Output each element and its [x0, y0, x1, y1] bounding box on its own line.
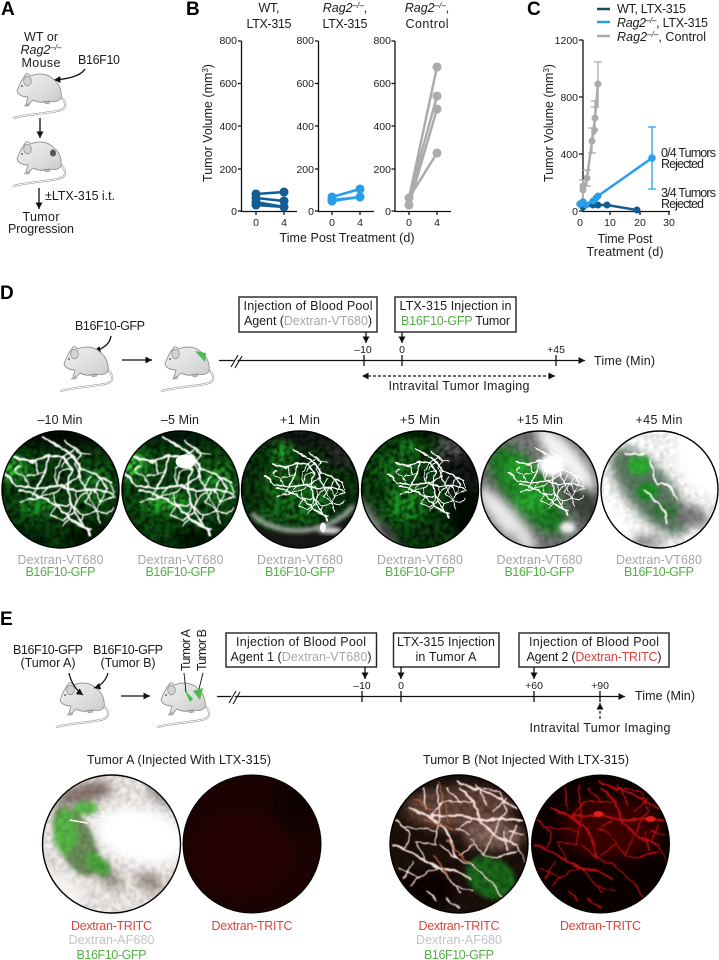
- chart: Rag2 LTX-315: 200: [296, 164, 314, 176]
- x axis title: Time Post Treatment (d): [280, 231, 414, 245]
- series: Rag2 LTX-315: [577, 127, 656, 208]
- image: tumor B merged: Dextran-AF680: [416, 933, 502, 947]
- chart: Rag2 control: 0: [385, 206, 391, 218]
- heading: tumor A: Tumor A (Injected With LTX-315): [87, 753, 271, 767]
- chart: Rag2 LTX-315: Rag2: [323, 1, 353, 15]
- tumor B label: (Tumor B): [100, 656, 156, 670]
- panel A: tumor model: [1, 0, 120, 236]
- timeline: 0: [399, 344, 405, 356]
- timeline: 0: [398, 680, 404, 692]
- y axis title: 3: [201, 68, 210, 73]
- annotation: 0/4 rejected: 0/4 Tumors: [661, 146, 716, 160]
- image: -10 min: [1, 414, 120, 576]
- image: tumor B merged: [389, 774, 529, 960]
- image: tumor B TRITC: Dextran-TRITC: [560, 919, 641, 933]
- image: tumor B merged: Dextran-TRITC: [418, 919, 500, 933]
- outcome label: [8, 210, 74, 236]
- panel E: two-tumor imaging schedule and images: [0, 609, 695, 960]
- chart: Rag2 control: [373, 1, 451, 229]
- image: +15 min: +15 Min: [517, 413, 563, 427]
- B16F10 label: B16F10: [78, 53, 120, 67]
- tumor B label: [93, 643, 163, 670]
- image: -5 min: [121, 414, 240, 576]
- icon: mouse with tumor: [13, 142, 65, 186]
- axes: 10: [604, 217, 616, 229]
- icon: mouse with GFP tumor: [161, 347, 213, 391]
- callout: blood pool agent 2: Injection of Blood Pool: [529, 635, 659, 649]
- outcome label: Progression: [8, 222, 74, 236]
- chart: Rag2 LTX-315: 0: [329, 217, 335, 229]
- label: tumor B rotated: Tumor B: [195, 629, 209, 671]
- image: -5 min: B16F10-GFP: [146, 565, 216, 579]
- chart: Rag2 control: 0: [406, 217, 412, 229]
- chart: Rag2 control: 800: [373, 35, 391, 47]
- chart: WT LTX-315: 4: [281, 217, 287, 229]
- heading: tumor B: Tumor B (Not Injected With LTX-315): [423, 753, 629, 767]
- image: +15 min: B16F10-GFP: [504, 565, 574, 579]
- mouse label: Rag2: [20, 43, 50, 57]
- chart: Rag2 LTX-315: 400: [296, 121, 314, 133]
- arrow: imaging window: [363, 375, 555, 377]
- axes: 0: [572, 206, 578, 218]
- chart: WT LTX-315: 600: [219, 78, 237, 90]
- arrow: to tumor mouse: [121, 695, 150, 697]
- annotation: 3/4 rejected: 3/4 Tumors: [661, 186, 716, 200]
- outcome label: Tumor: [22, 210, 60, 224]
- image: +1 min: Dextran-VT680: [257, 553, 343, 567]
- image: +5 min: +5 Min: [400, 413, 440, 427]
- chart: WT LTX-315: LTX-315: [246, 17, 292, 31]
- arrow: 0: [401, 332, 403, 343]
- icon: mouse: [56, 683, 108, 727]
- legend: Rag2: [617, 30, 647, 44]
- chart: WT LTX-315: 800: [219, 35, 237, 47]
- image: tumor A TRITC: Dextran-TRITC: [212, 919, 292, 933]
- arrow: to tumor mouse: [122, 359, 152, 361]
- y axis title: Tumor Volume (mm: [201, 73, 215, 182]
- legend: [597, 2, 708, 44]
- legend: , Control: [658, 30, 706, 44]
- legend: Rag2: [617, 16, 646, 30]
- callout: blood pool agent 2: [519, 633, 669, 667]
- panel D: intravital imaging schedule and images: [0, 283, 719, 579]
- chart: Rag2 LTX-315: ,: [364, 1, 367, 15]
- chart: Rag2 control: ,: [446, 1, 449, 15]
- image: tumor B TRITC: [530, 774, 670, 933]
- chart: Rag2 control: 600: [373, 78, 391, 90]
- chart: Rag2 control: Rag2: [405, 1, 435, 15]
- chart: Rag2 LTX-315: –/–: [352, 1, 364, 10]
- image: tumor A merged: Dextran-TRITC: [71, 919, 152, 933]
- image: -10 min: Dextran-VT680: [18, 553, 104, 567]
- chart: WT LTX-315: 200: [219, 164, 237, 176]
- mouse label: [20, 30, 62, 70]
- annotation: 0/4 rejected: Rejected: [661, 157, 704, 171]
- image: tumor A merged: [42, 774, 182, 959]
- mouse label: –/–: [49, 43, 62, 52]
- panel letter E: E: [0, 609, 13, 630]
- arrow: +60: [533, 667, 535, 679]
- legend: WT, LTX-315: [617, 2, 686, 16]
- image: +1 min: B16F10-GFP: [265, 565, 335, 579]
- tumor B label: B16F10-GFP: [93, 643, 163, 657]
- arrow: imaging at +90: [599, 703, 601, 719]
- image: +45 min: +45 Min: [636, 413, 683, 427]
- chart: Rag2 control: 400: [373, 121, 391, 133]
- arrow: treatment: [38, 188, 40, 209]
- chart: WT LTX-315: WT,: [258, 1, 280, 15]
- chart: Rag2 LTX-315: 800: [296, 35, 314, 47]
- chart: Rag2 control: 4: [434, 217, 440, 229]
- axes: 0: [577, 217, 583, 229]
- annotation: 0/4 rejected: [661, 146, 716, 171]
- x axis title: Treatment (d): [586, 245, 664, 259]
- image: +45 min: B16F10-GFP: [624, 565, 694, 579]
- arrow: tumor B injection: [94, 673, 108, 688]
- tumor A label: B16F10-GFP: [13, 643, 83, 657]
- callout: LTX-315 injection: B16F10-GFP Tumor: [401, 314, 510, 328]
- imaging label: Intravital Tumor Imaging: [388, 379, 530, 393]
- timeline: [219, 344, 655, 368]
- callout: blood pool agent 1: [226, 633, 376, 667]
- callout: blood pool agent 1: Injection of Blood Pool: [236, 635, 366, 649]
- y axis title: 3: [542, 68, 551, 73]
- label: tumor A rotated: Tumor A: [179, 628, 193, 671]
- axes: 800: [560, 92, 578, 104]
- callout: blood pool agent 2: Agent 2 (Dextran-TRITC): [526, 650, 662, 664]
- annotation: 3/4 rejected: Rejected: [661, 197, 704, 211]
- chart: Rag2 LTX-315: LTX-315: [322, 17, 368, 31]
- axes: 20: [634, 217, 646, 229]
- image: +45 min: Dextran-VT680: [616, 553, 702, 567]
- panel letter D: D: [0, 283, 14, 304]
- callout: LTX-315 injection: [394, 633, 499, 667]
- chart: Rag2 LTX-315: 600: [296, 78, 314, 90]
- series: WT: [580, 202, 640, 213]
- arrow: down: [39, 118, 41, 138]
- tumor A label: (Tumor A): [20, 656, 76, 670]
- y axis title: ): [542, 64, 556, 68]
- image: +5 min: Dextran-VT680: [377, 553, 463, 567]
- treatment label: ±LTX-315 i.t.: [45, 189, 115, 203]
- timeline: Time (Min): [635, 689, 695, 703]
- image: +15 min: Dextran-VT680: [496, 553, 583, 567]
- tumor A label: [13, 643, 83, 670]
- arrow: injection: [54, 69, 85, 80]
- icon: mouse with two tumors: [157, 673, 209, 727]
- mouse label: Mouse: [22, 56, 61, 70]
- axes: [555, 35, 675, 229]
- chart: Rag2 control: 200: [373, 164, 391, 176]
- imaging label: Intravital Tumor Imaging: [530, 721, 671, 735]
- axes: 400: [560, 149, 578, 161]
- timeline: –10: [354, 344, 372, 356]
- callout: LTX-315 injection: LTX-315 Injection in: [400, 299, 512, 313]
- legend: , LTX-315: [656, 16, 708, 30]
- chart: Rag2 LTX-315: 4: [357, 217, 363, 229]
- image: +5 min: B16F10-GFP: [385, 565, 455, 579]
- x axis title: [586, 232, 664, 259]
- arrow: 0: [400, 667, 402, 679]
- timeline: +45: [547, 344, 565, 356]
- axes: 30: [663, 217, 675, 229]
- timeline: –10: [353, 680, 371, 692]
- cell label: B16F10-GFP: [75, 319, 145, 333]
- image: tumor A merged: Dextran-AF680: [68, 933, 155, 947]
- series: control: [579, 62, 602, 200]
- chart: Rag2 control: Control: [406, 17, 448, 31]
- callout: blood pool agent 1: Agent 1 (Dextran-VT680): [230, 650, 372, 664]
- chart: WT LTX-315: 400: [219, 121, 237, 133]
- arrow: -10: [364, 667, 366, 679]
- chart: WT LTX-315: 0: [253, 217, 259, 229]
- chart: Rag2 LTX-315: [296, 1, 374, 229]
- y axis title: Tumor Volume (mm: [542, 73, 556, 182]
- timeline: [217, 680, 695, 704]
- image: -5 min: –5 Min: [161, 413, 199, 427]
- callout: blood pool agent: Injection of Blood Pool: [244, 299, 372, 313]
- annotation: 3/4 rejected: [661, 186, 716, 211]
- icon: mouse: [60, 347, 112, 391]
- callout: LTX-315 injection: in Tumor A: [416, 650, 477, 664]
- image: tumor A TRITC: [182, 774, 322, 933]
- timeline: +90: [591, 680, 609, 692]
- chart: Rag2 control: –/–: [434, 1, 446, 10]
- image: -10 min: –10 Min: [38, 413, 83, 427]
- image: +1 min: +1 Min: [280, 413, 320, 427]
- timeline: Time (Min): [594, 354, 655, 368]
- x axis title: Time Post: [598, 232, 653, 246]
- legend: –/–: [645, 16, 657, 25]
- image: +1 min: [238, 413, 365, 579]
- image: +15 min: [480, 414, 599, 576]
- chart: Rag2 LTX-315: 0: [308, 206, 314, 218]
- panel C: mean tumor volume chart: [527, 0, 716, 259]
- image: +45 min: [600, 414, 719, 576]
- callout: blood pool agent: Agent (Dextran-VT680): [244, 314, 372, 328]
- axes: 1200: [555, 35, 578, 47]
- callout: LTX-315 injection: LTX-315 Injection: [397, 635, 495, 649]
- image: -10 min: B16F10-GFP: [26, 565, 96, 579]
- y axis title: ): [201, 64, 215, 68]
- mouse label: WT or: [24, 30, 58, 44]
- image: +5 min: [360, 414, 480, 576]
- legend: –/–: [646, 30, 659, 39]
- callout: blood pool agent: [239, 297, 377, 332]
- image: -5 min: Dextran-VT680: [138, 553, 224, 567]
- callout: LTX-315 injection: [395, 297, 516, 332]
- timeline: +60: [525, 680, 543, 692]
- panel B: individual tumor volume charts: [186, 0, 451, 245]
- arrow: tumor A injection: [69, 673, 83, 695]
- icon: mouse: [13, 74, 65, 118]
- arrow: -10: [365, 332, 367, 343]
- arrow: injection: [94, 336, 111, 351]
- chart: WT LTX-315: 0: [231, 206, 237, 218]
- chart: WT LTX-315: [219, 1, 297, 229]
